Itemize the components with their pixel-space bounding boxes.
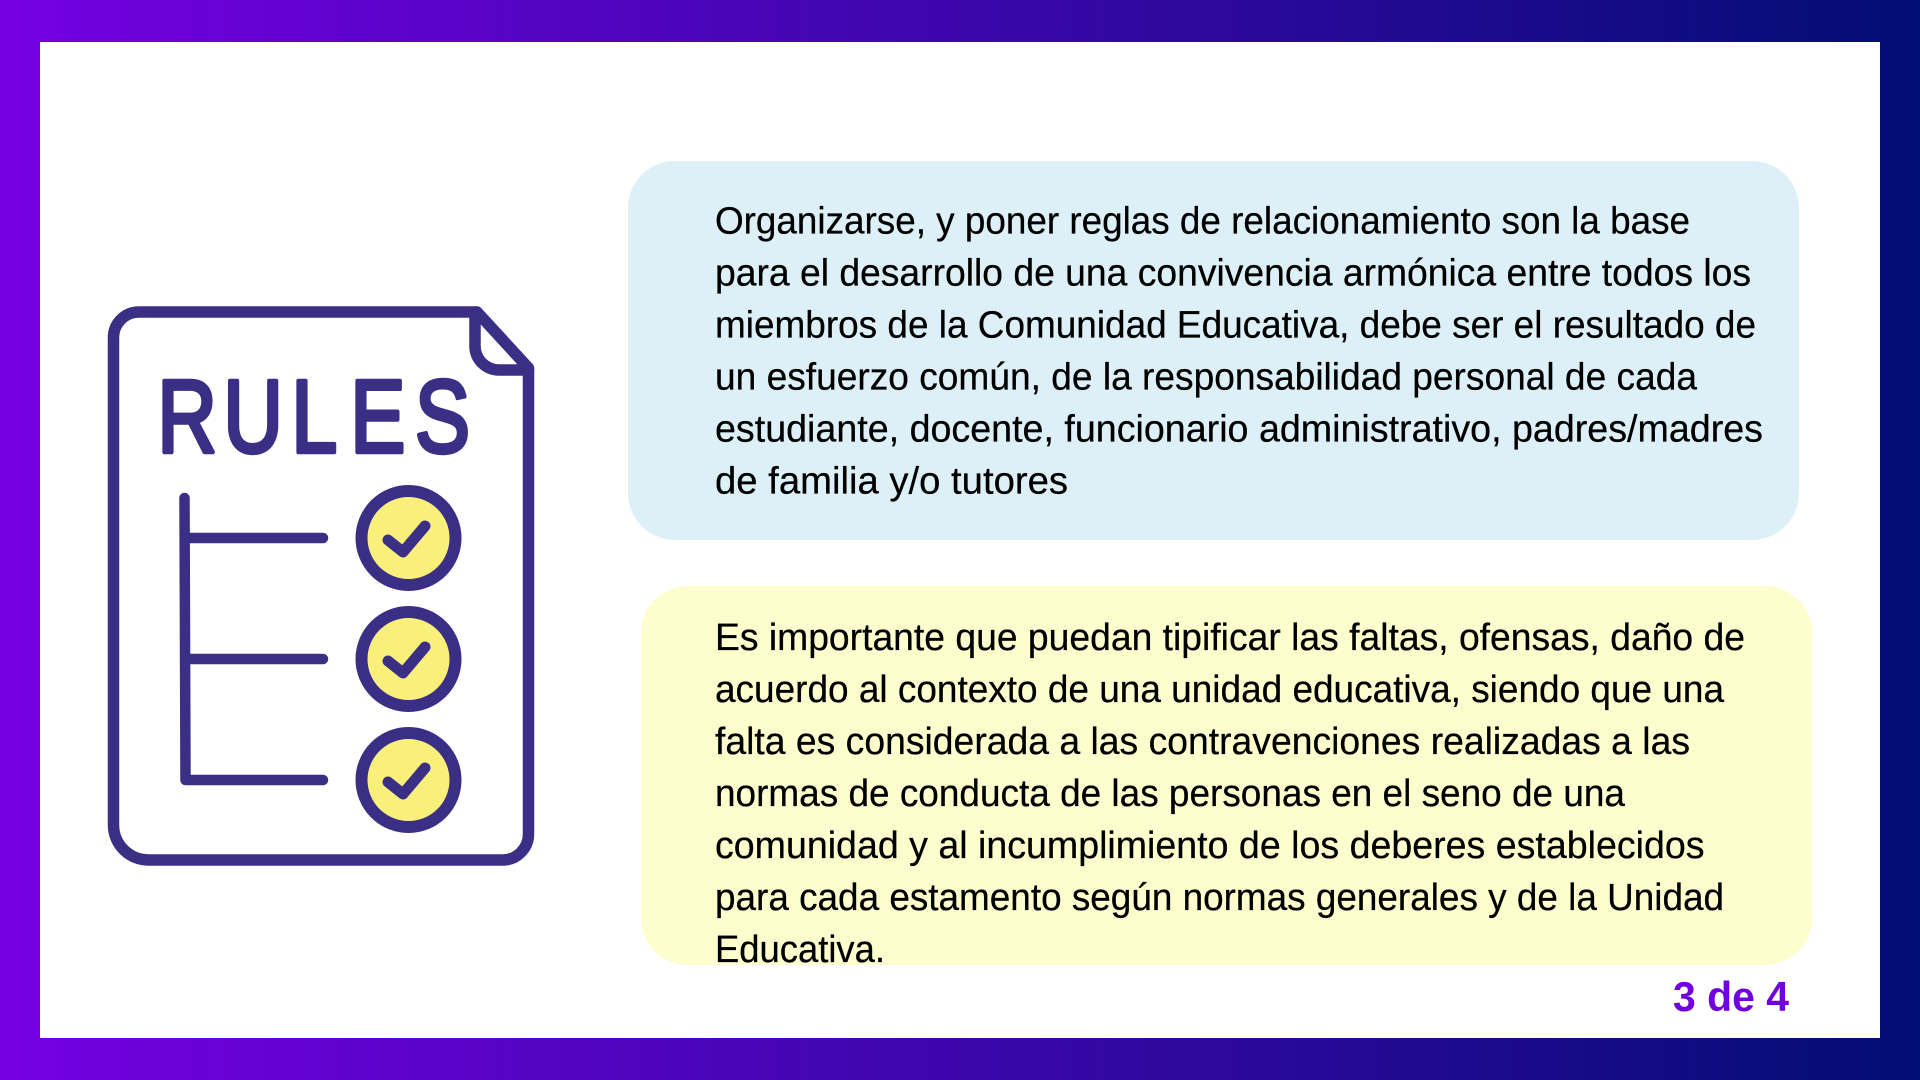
- text block: organizarse: un esfuerzo común, de la responsabilidad personal de cada: [715, 356, 1698, 398]
- panel background blue: [628, 161, 1799, 540]
- text block: tipificar faltas: normas de conducta de las personas en el seno de una: [715, 773, 1626, 815]
- text block: organizarse: de familia y/o tutores: [715, 460, 1068, 502]
- text block: organizarse: miembros de la Comunidad Educativa, debe ser el resultado de: [715, 304, 1756, 346]
- page indicator: 3 de 4: [1673, 973, 1790, 1020]
- icon label: RULES: RULES: [157, 359, 470, 474]
- text block: tipificar faltas: Educativa.: [715, 929, 885, 971]
- icon: rules checklist document: [114, 312, 528, 860]
- checklist tree lines: [184, 498, 323, 780]
- icon: folded corner: [475, 312, 528, 370]
- text block: tipificar faltas: acuerdo al contexto de una unidad educativa, siendo que una: [715, 669, 1725, 711]
- text block: organizarse: para el desarrollo de una convivencia armónica entre todos los: [715, 252, 1751, 294]
- text block: tipificar faltas: falta es considerada a las contravenciones realizadas a las: [715, 721, 1690, 763]
- text block: organizarse: estudiante, docente, funcionario administrativo, padres/madres: [715, 408, 1763, 450]
- panel: organizarse: [628, 161, 1799, 540]
- panel background yellow: [641, 586, 1812, 965]
- text block: tipificar faltas: comunidad y al incumplimiento de los deberes establecidos: [715, 825, 1704, 867]
- text block: tipificar faltas: [715, 617, 1745, 971]
- text block: organizarse: Organizarse, y poner reglas de relacionamiento son la base: [715, 200, 1690, 242]
- text block: tipificar faltas: para cada estamento según normas generales y de la Unidad: [715, 877, 1724, 919]
- icon: check circle 3: [362, 733, 456, 827]
- panel: tipificar faltas: [641, 586, 1812, 971]
- icon: document outline: [114, 312, 528, 860]
- icon: check circle 2: [362, 612, 456, 706]
- text block: organizarse: [715, 200, 1763, 502]
- icon: check circle 1: [362, 491, 456, 585]
- text block: tipificar faltas: Es importante que puedan tipificar las faltas, ofensas, daño de: [715, 617, 1745, 659]
